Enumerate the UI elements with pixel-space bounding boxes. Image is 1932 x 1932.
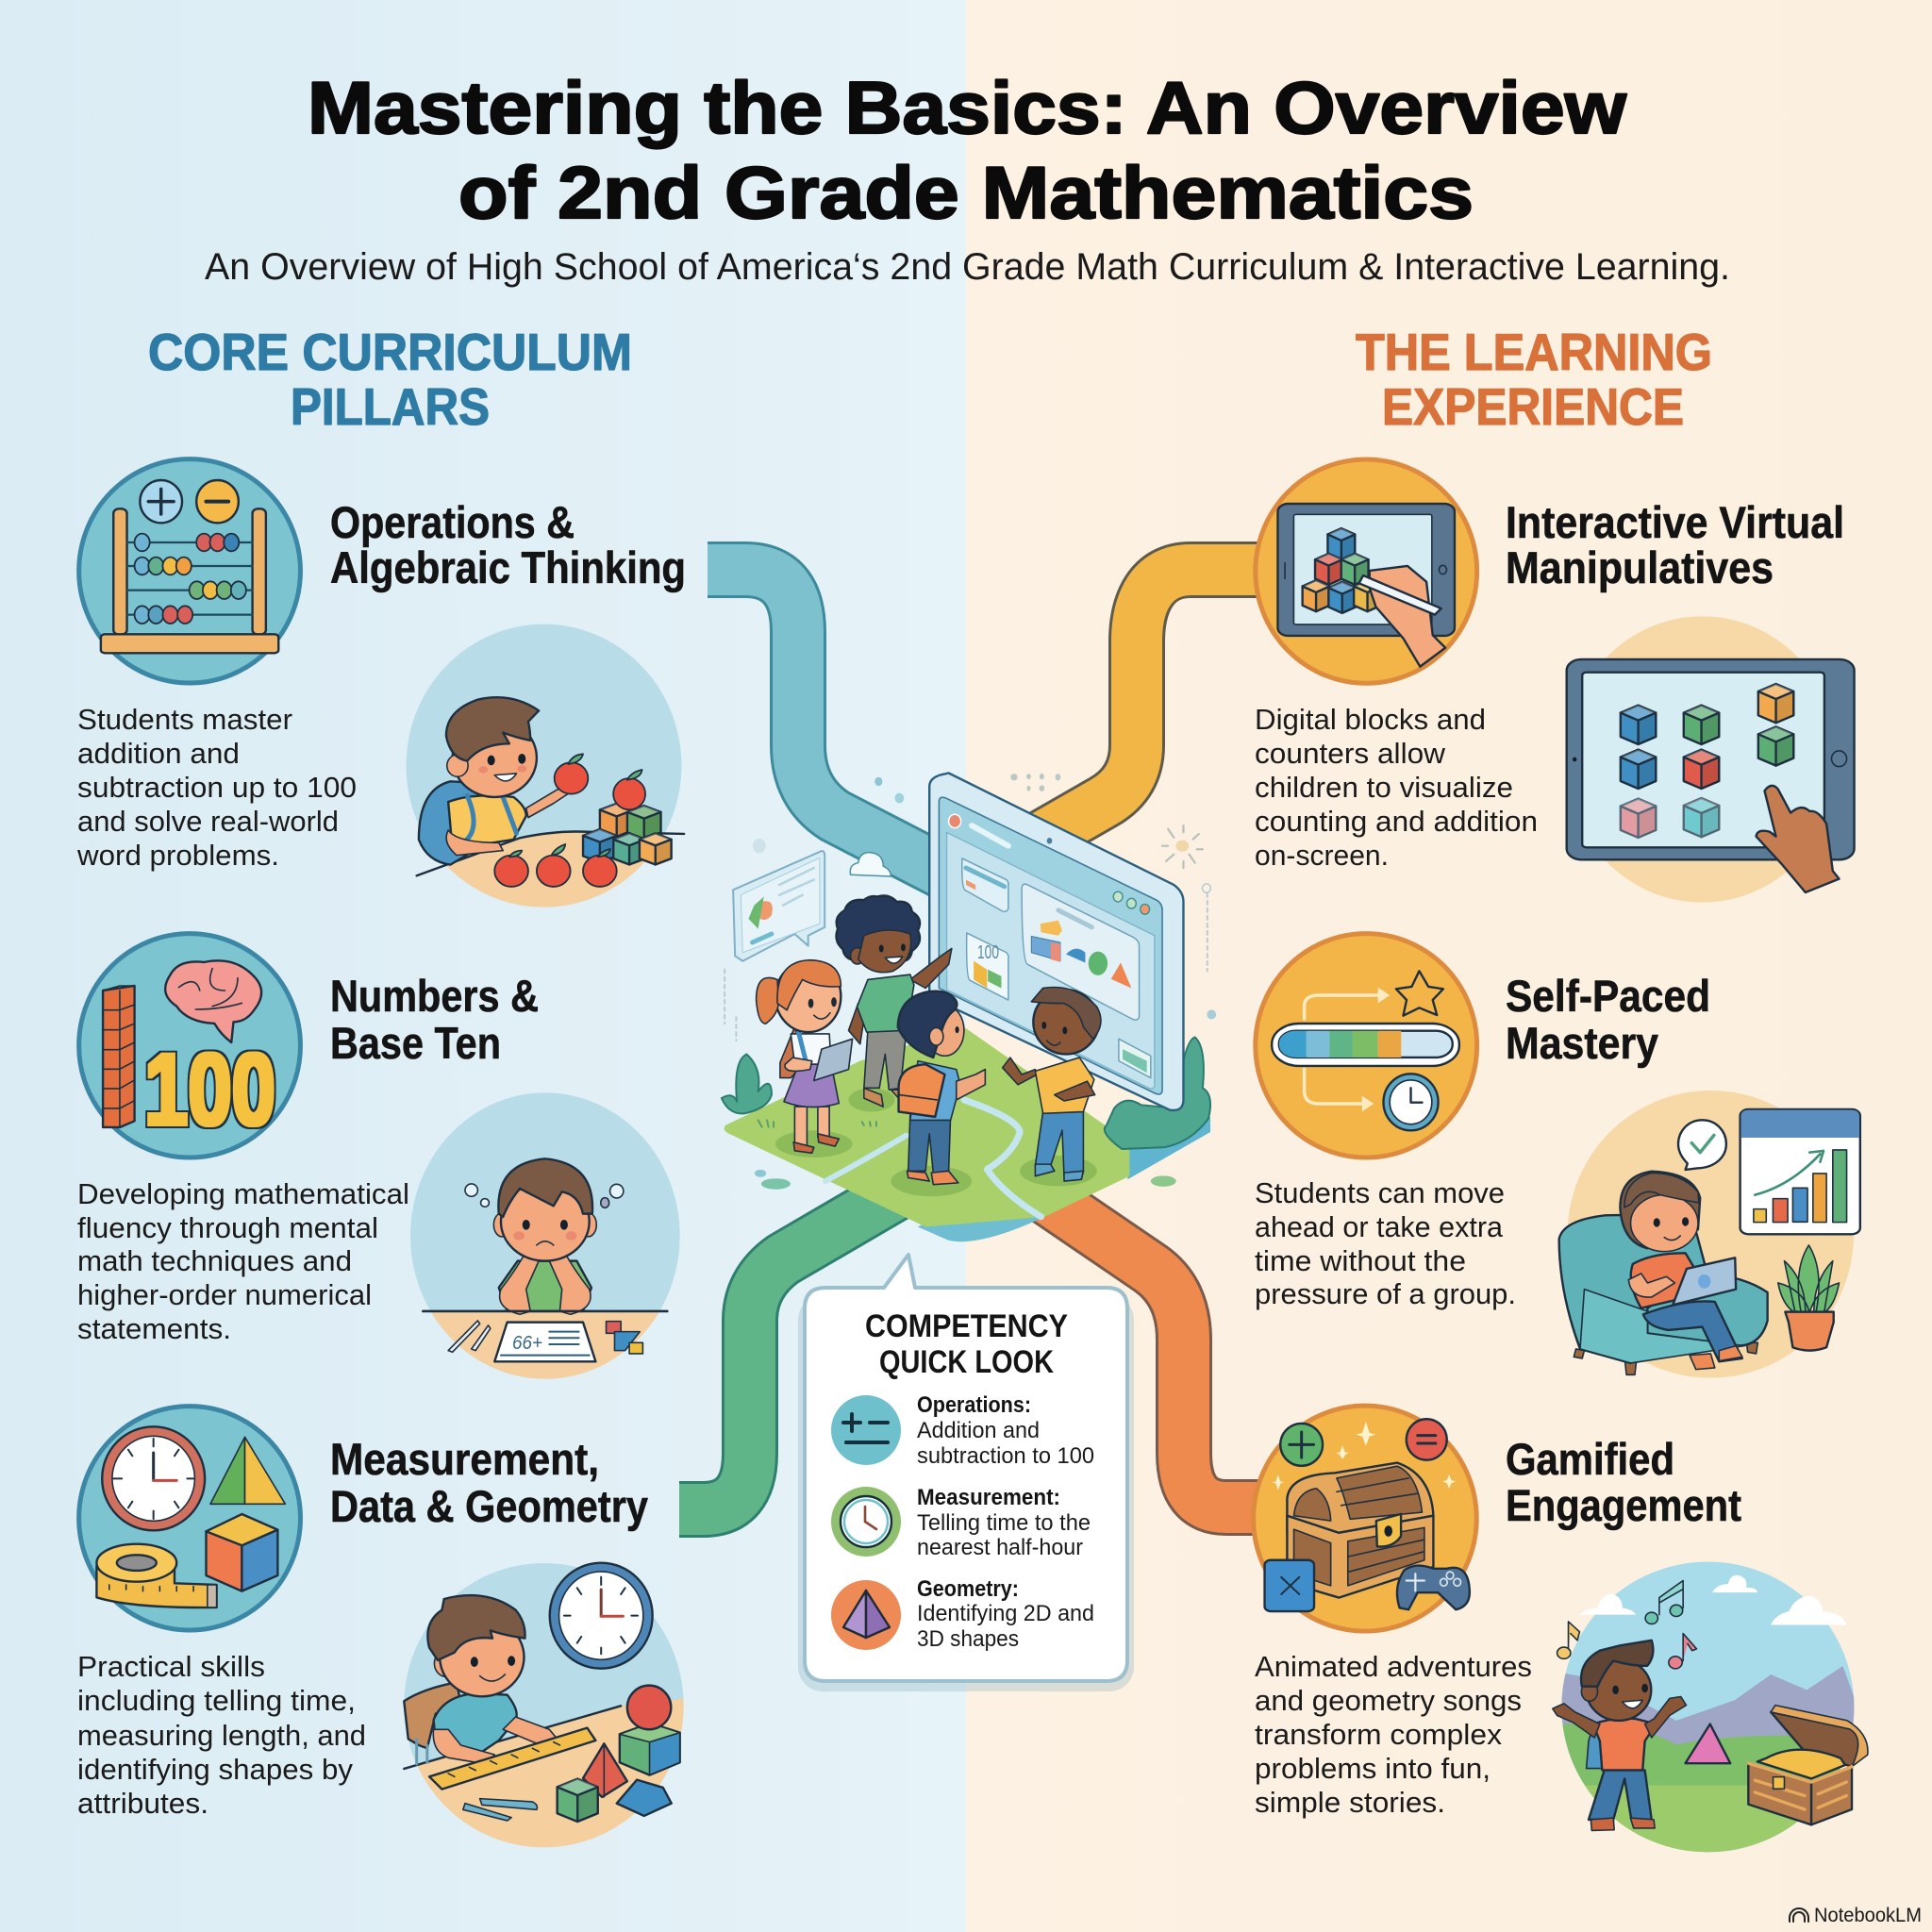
decorative sparkles and dots xyxy=(724,774,1216,1190)
description: problems into fun, xyxy=(1255,1752,1491,1785)
heading: the learning experience: EXPERIENCE xyxy=(1382,377,1684,436)
icon: clock, tape, shapes xyxy=(79,1407,300,1630)
description xyxy=(1255,703,1538,872)
description: transform complex xyxy=(1255,1718,1503,1751)
subtitle: An Overview of High School of America‘s 2nd Grade Math Curriculum & Interactive Learning. xyxy=(205,246,1730,288)
panel: interactive virtual manipulatives xyxy=(1255,459,1855,903)
description: measuring length, and xyxy=(77,1719,366,1752)
heading: Self-Paced xyxy=(1506,971,1710,1021)
heading: the learning experience xyxy=(1356,323,1712,436)
heading xyxy=(330,497,686,592)
plant right xyxy=(1105,1038,1210,1149)
heading: Engagement xyxy=(1506,1480,1741,1530)
description: Digital blocks and xyxy=(1255,703,1486,736)
title: Mastering the Basics: An Overview xyxy=(308,66,1626,149)
description: counting and addition xyxy=(1255,805,1538,838)
callout: competency quick look xyxy=(798,1255,1134,1691)
icon: abacus xyxy=(79,459,300,683)
heading: Base Ten xyxy=(330,1018,501,1068)
description: Developing mathematical xyxy=(77,1177,409,1210)
heading: Data & Geometry xyxy=(330,1481,648,1531)
item: geometry: 3D shapes xyxy=(917,1626,1019,1652)
description: Animated adventures xyxy=(1255,1650,1532,1683)
description: counters allow xyxy=(1255,737,1446,770)
description: Practical skills xyxy=(77,1650,265,1683)
description: simple stories. xyxy=(1255,1786,1445,1819)
boy in yellow shirt xyxy=(1003,988,1101,1186)
item: geometry: Geometry: xyxy=(917,1576,1019,1602)
icon: treasure chest and controller xyxy=(1254,1406,1476,1631)
heading: core curriculum pillars: CORE CURRICULUM xyxy=(148,323,632,381)
illustration: boy measuring xyxy=(393,1563,689,1852)
description xyxy=(1255,1176,1516,1310)
panel: self-paced mastery xyxy=(1255,934,1860,1378)
description: word problems. xyxy=(76,839,279,872)
icon: tablet and stylus xyxy=(1256,459,1477,683)
illustration: boy with apples xyxy=(393,625,684,912)
speech bubble left xyxy=(733,851,824,961)
icon: progress bar, star and clock xyxy=(1256,934,1477,1158)
ground island xyxy=(724,1027,1210,1241)
card title xyxy=(865,1308,1068,1380)
tall boy pointing xyxy=(837,895,952,1111)
description: higher-order numerical xyxy=(77,1278,372,1311)
description: and geometry songs xyxy=(1255,1684,1522,1717)
connector: yellow path xyxy=(1033,570,1259,842)
description: subtraction up to 100 xyxy=(77,771,357,804)
description: identifying shapes by xyxy=(77,1753,353,1786)
worksheet numerals: 66+ xyxy=(512,1333,542,1354)
item: measurement: Telling time to the xyxy=(917,1510,1091,1536)
description: Students master xyxy=(77,703,292,736)
illustration: child in armchair with chart xyxy=(1559,1091,1860,1378)
item: measurement xyxy=(831,1485,1091,1560)
connector: orange path xyxy=(1047,1198,1259,1507)
panel: operations and algebraic thinking xyxy=(76,459,686,912)
item: operations: subtraction to 100 xyxy=(917,1443,1094,1469)
description: on-screen. xyxy=(1255,839,1389,872)
description xyxy=(77,1650,366,1820)
cloud xyxy=(850,853,891,876)
heading: Gamified xyxy=(1506,1434,1674,1484)
background: right cream half xyxy=(966,0,1932,1932)
card shadow xyxy=(798,1295,1134,1691)
description: attributes. xyxy=(77,1787,208,1820)
icon: pyramid xyxy=(831,1580,901,1650)
item: operations: Operations: xyxy=(917,1392,1031,1418)
description: statements. xyxy=(77,1312,231,1345)
giant tablet xyxy=(929,773,1183,1110)
panel: numbers and base ten xyxy=(77,934,689,1387)
illustration: boy thinking xyxy=(410,1092,680,1379)
connector: teal path xyxy=(708,570,981,891)
heading: the learning experience: THE LEARNING xyxy=(1356,323,1712,381)
description xyxy=(1255,1650,1532,1819)
icon: plus minus xyxy=(831,1395,901,1465)
description: addition and xyxy=(77,737,240,770)
card xyxy=(805,1255,1127,1681)
description: fluency through mental xyxy=(77,1211,378,1244)
heading xyxy=(330,1434,648,1531)
heading: Manipulatives xyxy=(1506,542,1774,592)
description xyxy=(77,1177,409,1345)
girl xyxy=(757,960,853,1158)
item: operations: Addition and xyxy=(917,1418,1040,1443)
icon: brain, ten-rod and 100 xyxy=(79,934,300,1158)
heading xyxy=(330,971,539,1068)
heading: core curriculum pillars: PILLARS xyxy=(291,377,490,436)
panel: measurement, data and geometry xyxy=(77,1407,689,1852)
item: geometry: Identifying 2D and xyxy=(917,1601,1094,1626)
heading: Interactive Virtual xyxy=(1506,497,1844,547)
background: left blue half xyxy=(0,0,966,1932)
heading: Operations & xyxy=(330,497,575,547)
tablet card number: 100 xyxy=(977,942,999,963)
boy with orange backpack xyxy=(891,991,985,1196)
panel: gamified engagement xyxy=(1254,1406,1868,1854)
description: Students can move xyxy=(1255,1176,1505,1209)
heading xyxy=(1506,497,1844,592)
central scene: children at giant tablet xyxy=(722,773,1216,1241)
illustration: boy singing with treasure xyxy=(1553,1560,1868,1854)
description: time without the xyxy=(1255,1244,1466,1277)
item: geometry xyxy=(831,1576,1094,1652)
heading: Measurement, xyxy=(330,1434,599,1484)
description xyxy=(76,703,357,872)
heading: core curriculum pillars xyxy=(148,323,632,436)
card title: QUICK LOOK xyxy=(879,1344,1054,1380)
item: measurement: Measurement: xyxy=(917,1485,1060,1510)
number 100: 100 xyxy=(144,1032,275,1146)
heading xyxy=(1506,971,1710,1068)
watermark: NotebookLM: NotebookLM xyxy=(1814,1905,1922,1926)
description: and solve real-world xyxy=(77,805,339,838)
description: math techniques and xyxy=(77,1244,352,1277)
connector: green path xyxy=(679,1193,896,1509)
item: operations xyxy=(831,1392,1094,1469)
card title: COMPETENCY xyxy=(865,1308,1068,1344)
description: pressure of a group. xyxy=(1255,1277,1516,1310)
title xyxy=(308,66,1626,234)
heading: Mastery xyxy=(1506,1018,1658,1068)
icon: clock xyxy=(831,1487,901,1557)
description: children to visualize xyxy=(1255,771,1513,804)
illustration: tablet with blocks xyxy=(1565,616,1855,903)
item: measurement: nearest half-hour xyxy=(917,1535,1083,1560)
heading: Numbers & xyxy=(330,971,539,1021)
description: ahead or take extra xyxy=(1255,1210,1504,1243)
heading xyxy=(1506,1434,1741,1530)
heading: Algebraic Thinking xyxy=(330,542,686,592)
plant left xyxy=(722,1054,772,1113)
title: of 2nd Grade Mathematics xyxy=(458,151,1474,234)
description: including telling time, xyxy=(77,1684,356,1717)
